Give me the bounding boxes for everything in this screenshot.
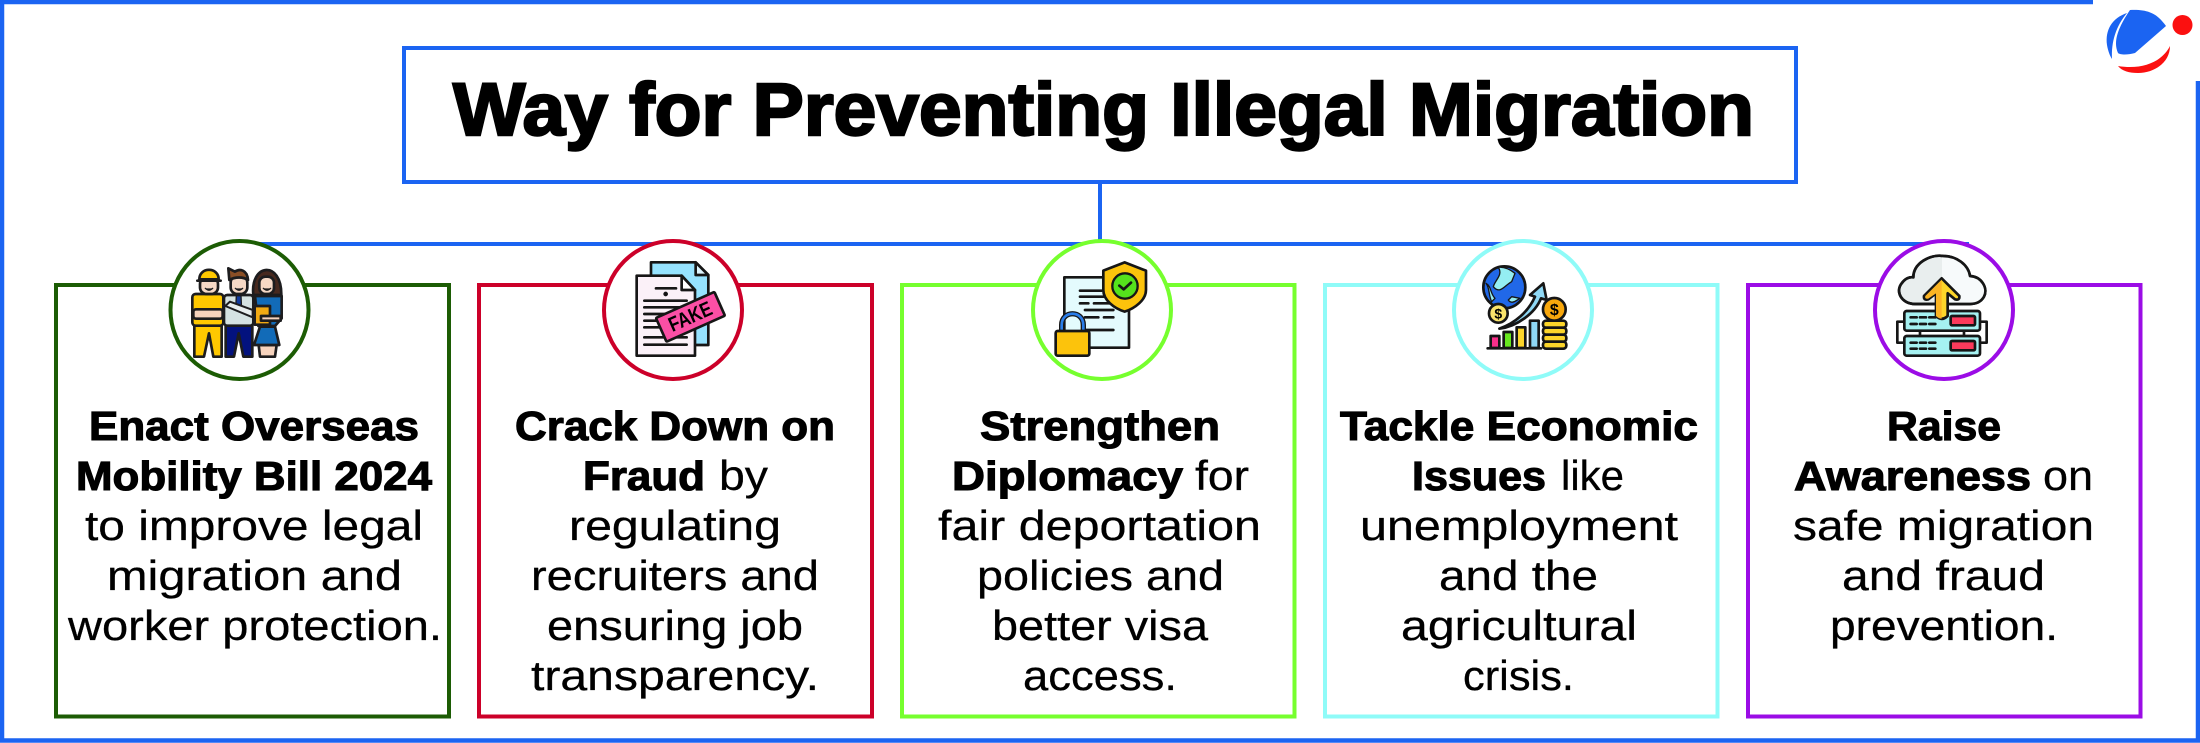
icon circle [1875,241,2013,379]
logo [2107,10,2192,73]
panel: crack down on fraud [479,241,872,716]
body text: for [1195,452,1249,499]
coin symbol: $ [1550,302,1559,319]
panel: overseas mobility bill [56,241,449,716]
body text: Mobility Bill 2024 [76,453,432,499]
connector lines [239,183,1969,244]
icon: three workers [192,268,282,357]
body text [67,403,442,649]
body text: Awareness [1794,453,2031,499]
icon circle [170,241,308,379]
body text: Enact Overseas [89,403,419,449]
body text: Tackle Economic [1340,403,1698,449]
body text: to improve legal [85,502,423,549]
body text: access. [1023,652,1177,699]
body text: Strengthen [980,403,1220,449]
icon: secure document [1056,262,1146,356]
body text: ensuring job [547,602,803,649]
panel: strengthen diplomacy [902,241,1294,716]
stamp label: FAKE [665,297,716,337]
body text: migration and [107,552,402,599]
icon: fake documents [637,262,725,356]
body text: agricultural [1401,602,1637,649]
body text: Diplomacy [952,453,1183,499]
body text: policies and [977,552,1224,599]
body text: crisis. [1463,652,1574,699]
body text: unemployment [1360,502,1678,549]
icon circle [1454,241,1592,379]
body text: recruiters and [531,552,819,599]
icon: globe and growth chart [1483,266,1566,349]
body text: and fraud [1842,552,2045,599]
body text: transparency. [531,652,819,699]
body text: Crack Down on [515,403,835,449]
body text: Raise [1887,403,2001,449]
body text: safe migration [1793,502,2094,549]
body text: regulating [569,502,781,549]
body text: better visa [992,602,1209,649]
body text [1793,403,2094,649]
body text [515,403,835,699]
icon: cloud upload server [1897,256,1987,356]
body text: by [719,452,768,499]
icon circle [604,241,742,379]
icon circle [1033,241,1171,379]
body text: worker protection. [67,602,442,649]
body text: on [2043,452,2093,499]
body text: Fraud [583,453,705,499]
body text: and the [1439,552,1598,599]
panel: tackle economic issues [1325,241,1718,716]
body text [1340,403,1698,699]
body text: Issues [1412,453,1546,499]
panel: raise awareness [1748,241,2140,716]
title box [404,48,1796,182]
body text: fair deportation [938,502,1261,549]
body text: prevention. [1830,602,2058,649]
body text [938,403,1261,699]
coin symbol: $ [1494,305,1502,321]
body text: like [1561,452,1624,499]
title text: Way for Preventing Illegal Migration [453,68,1754,151]
